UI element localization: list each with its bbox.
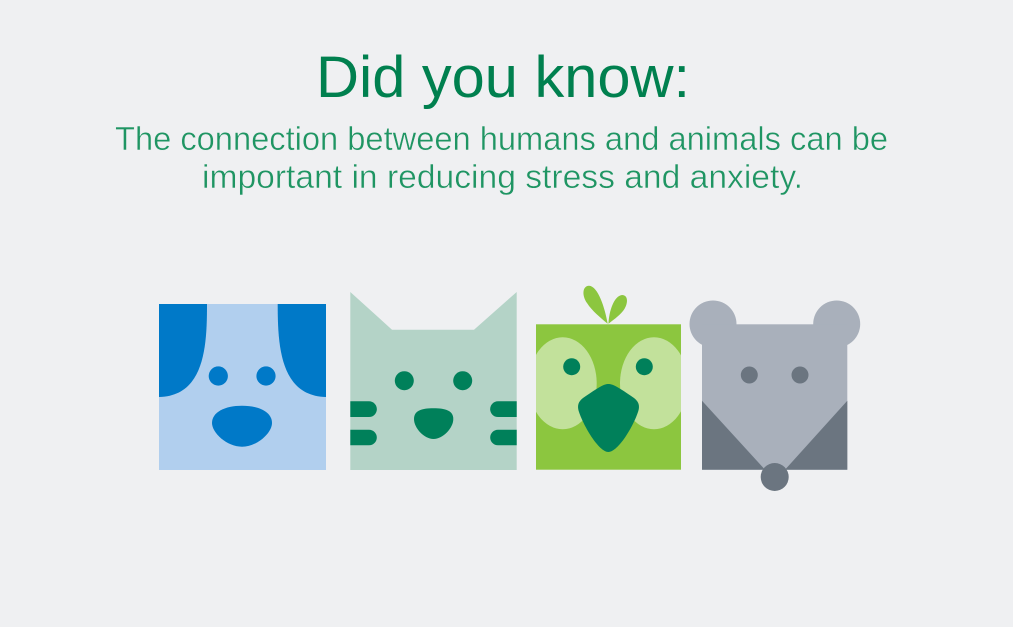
icon: mouse <box>690 300 860 491</box>
subtitle: important in reducing stress and anxiety. <box>202 158 803 195</box>
subtitle: The connection between humans and animals can be <box>115 120 888 157</box>
title: Did you know: <box>316 45 690 110</box>
icon: dog <box>159 304 326 470</box>
icon: bird <box>529 286 688 470</box>
icon: cat <box>350 292 517 470</box>
subtitle <box>115 120 888 195</box>
